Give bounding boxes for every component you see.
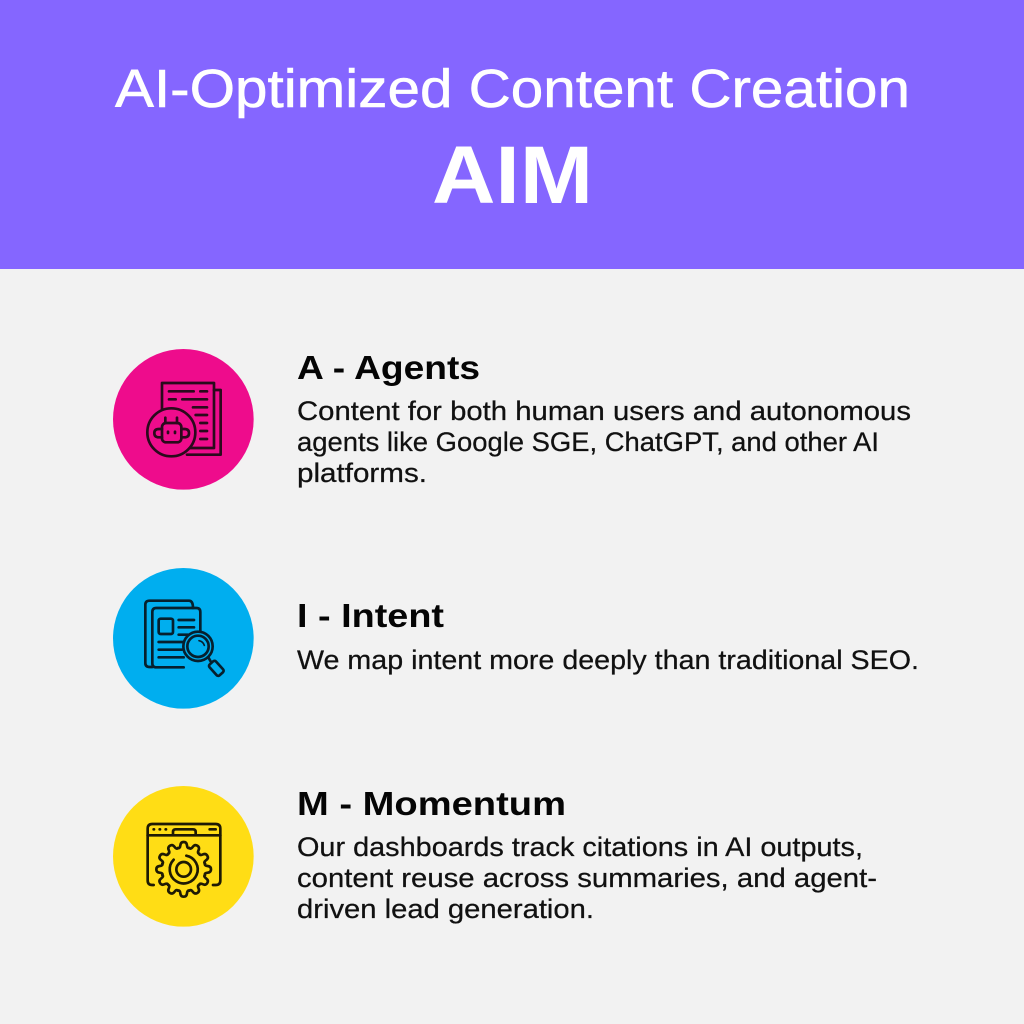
- description: driven lead generation.: [297, 894, 594, 924]
- section: M - Momentum: [113, 785, 877, 927]
- icon: documents with magnifier: [113, 568, 254, 709]
- heading: A - Agents: [297, 349, 480, 386]
- description: [297, 832, 877, 924]
- description: Content for both human users and autonomous: [297, 396, 911, 426]
- acronym heading: AIM: [432, 130, 593, 221]
- section: A - Agents: [113, 349, 911, 490]
- heading: M - Momentum: [297, 785, 566, 822]
- icon: browser window with gear: [113, 786, 254, 927]
- description: Our dashboards track citations in AI outputs,: [297, 832, 863, 862]
- description: We map intent more deeply than traditional SEO.: [297, 645, 919, 675]
- description: platforms.: [297, 458, 427, 488]
- title: AI-Optimized Content Creation: [115, 59, 910, 119]
- description: [297, 396, 911, 488]
- heading: I - Intent: [297, 597, 444, 634]
- header band: [0, 0, 1024, 269]
- description: content reuse across summaries, and agent-: [297, 863, 877, 893]
- description: agents like Google SGE, ChatGPT, and other AI: [297, 427, 879, 457]
- section: I - Intent: [113, 568, 919, 709]
- icon: document with robot: [113, 349, 254, 490]
- header panel: [0, 0, 1024, 269]
